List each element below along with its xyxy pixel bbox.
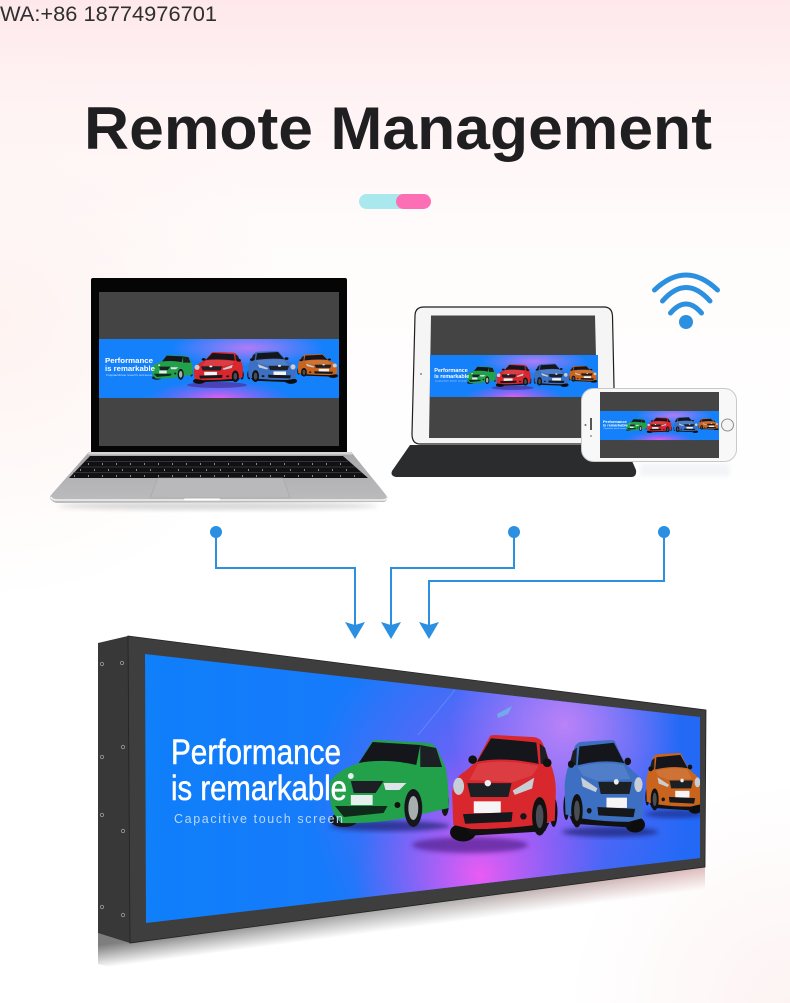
tablet banner: [430, 355, 598, 397]
laptop lid: [91, 278, 347, 453]
display floor reflection: [98, 868, 705, 966]
arrow: tablet to display: [381, 526, 520, 639]
phone reflection: [640, 464, 730, 476]
laptop: [50, 278, 388, 510]
tablet banner: Capacitive touch screen: [435, 379, 467, 382]
trackpad: [150, 478, 290, 498]
decorative pill: [359, 194, 431, 209]
laptop banner: [99, 339, 339, 398]
tablet cover: [392, 445, 636, 477]
display front frame: [128, 636, 706, 943]
phone body: [582, 388, 736, 462]
arrow: phone to display: [419, 526, 670, 639]
laptop banner: is remarkable: [105, 364, 155, 373]
tablet banner: is remarkable: [434, 374, 469, 380]
icon: wifi: [654, 275, 718, 329]
display headline second line: is remarkable: [171, 769, 347, 808]
contact line: WA:+86 18774976701: [0, 3, 217, 26]
stretched bar display: [98, 636, 706, 972]
phone banner: [600, 411, 719, 440]
phone home button: [722, 419, 734, 431]
title: Remote Management: [84, 95, 712, 162]
display headline: Performance: [171, 733, 341, 772]
keyboard: [69, 456, 368, 478]
phone: [582, 388, 736, 476]
car: green: [330, 740, 449, 827]
mounting screws: [100, 661, 125, 917]
laptop banner: Capacitive touch screen: [106, 373, 153, 377]
phone banner: Performance: [603, 420, 627, 424]
laptop banner: Performance: [105, 356, 153, 365]
tablet body: [412, 307, 615, 444]
display side face: [98, 636, 130, 943]
arrow: laptop to display: [210, 526, 365, 639]
phone banner: is remarkable: [603, 424, 628, 428]
display screen: [145, 650, 705, 930]
tablet banner: Performance: [434, 368, 468, 374]
tablet screen: [429, 316, 598, 438]
laptop base: [50, 453, 387, 503]
phone banner: Capacitive touch screen: [603, 427, 627, 430]
car: red: [450, 735, 557, 841]
car: orange: [645, 753, 702, 814]
phone screen: [600, 392, 719, 458]
tablet with keyboard cover: [392, 307, 636, 477]
laptop screen: [99, 292, 339, 446]
car: blue: [563, 740, 645, 833]
display caption: Capacitive touch screen: [174, 812, 343, 826]
